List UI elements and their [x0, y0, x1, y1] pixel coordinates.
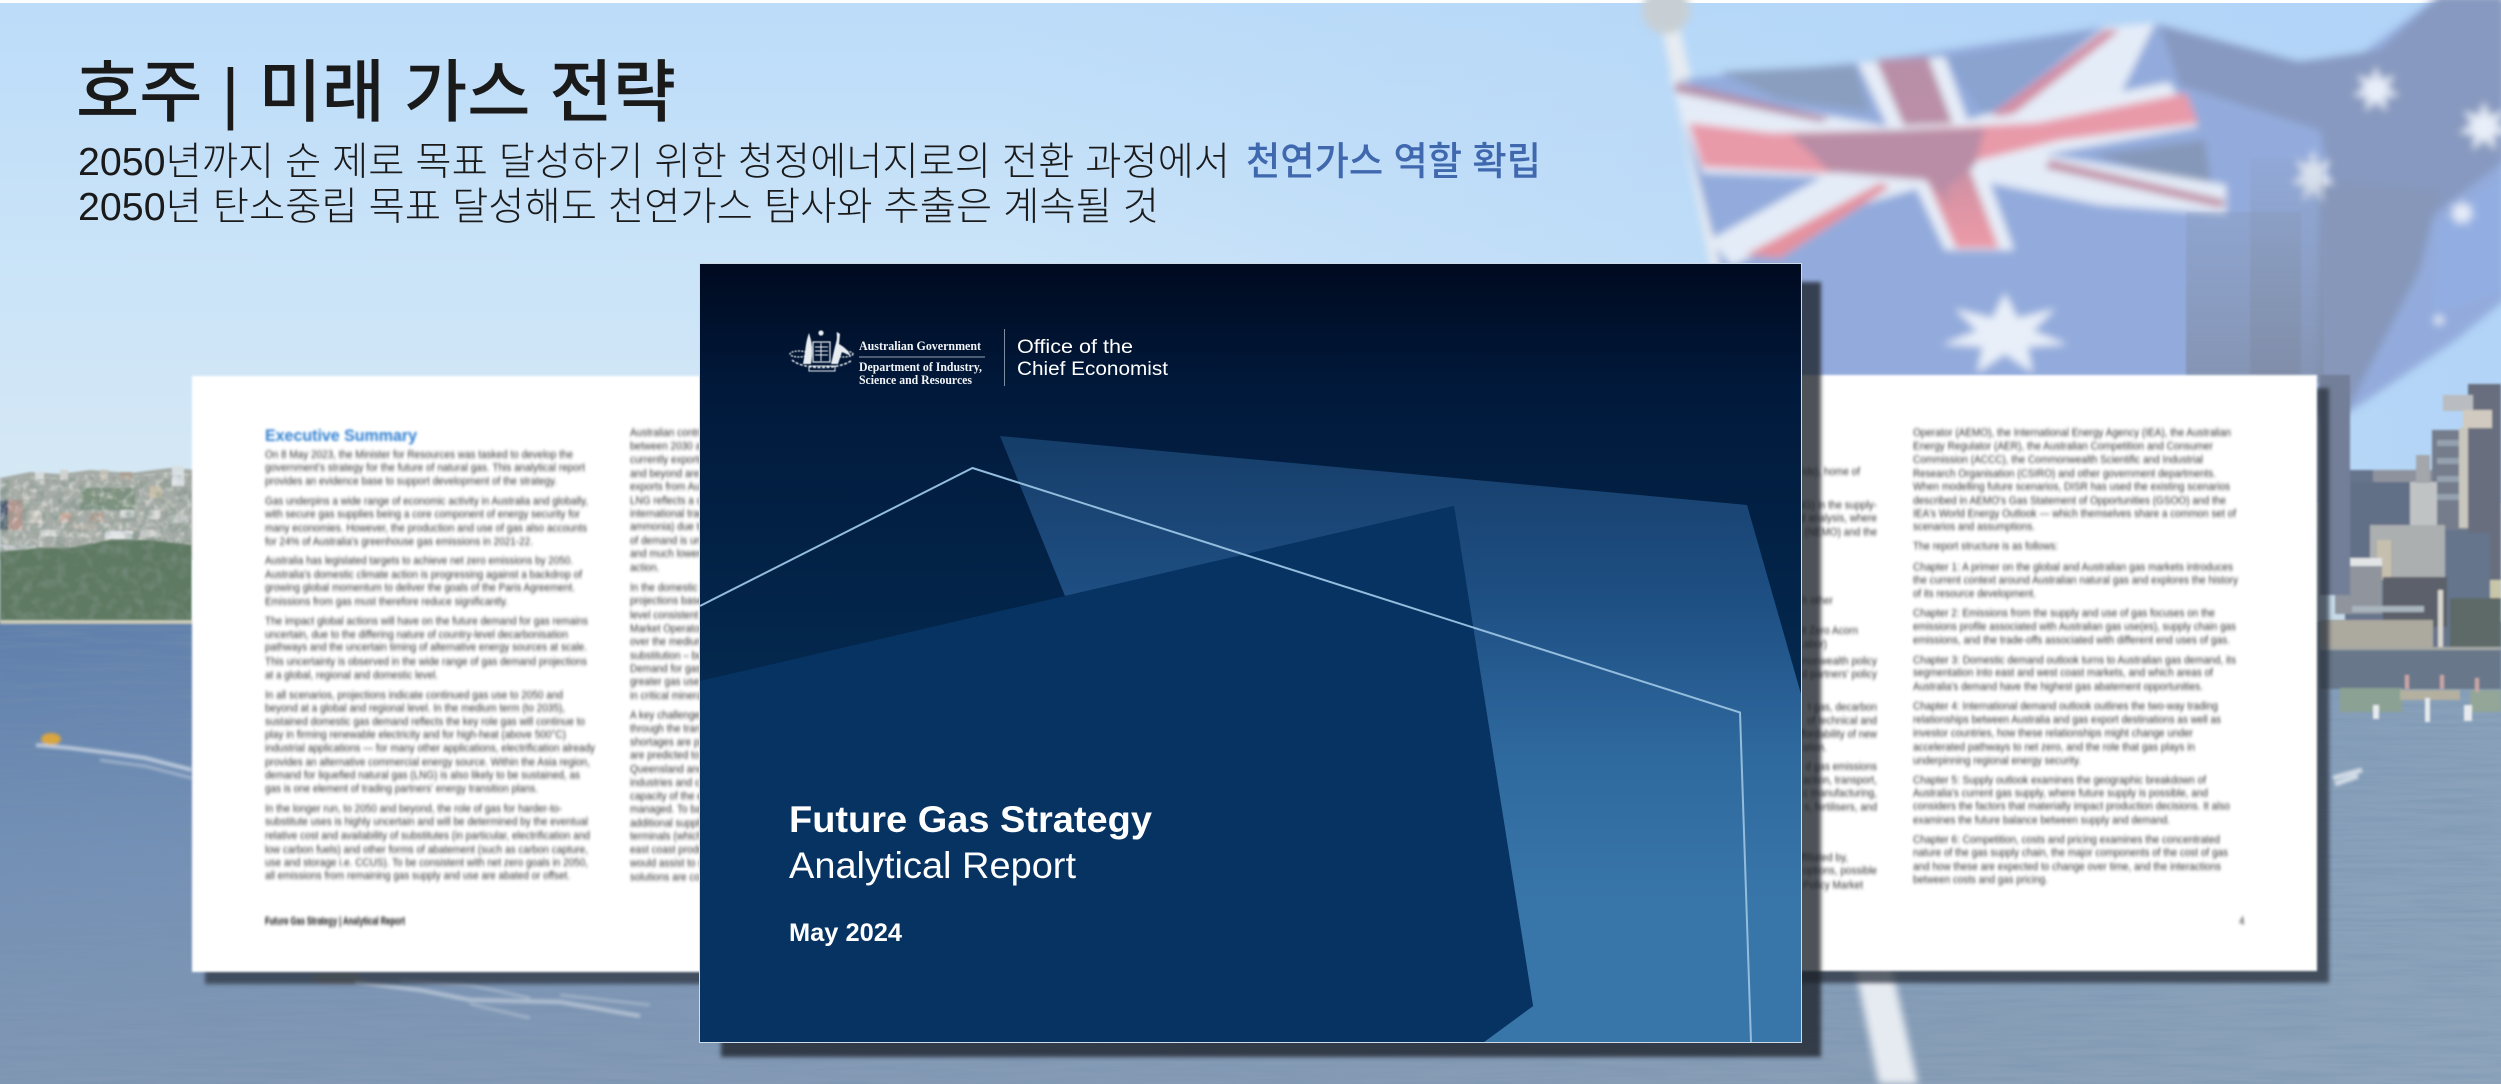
left page body column two: solutions are com: [630, 871, 708, 884]
left page sheet: [192, 376, 712, 972]
right page body column: the current context around Australian natural gas and explores the history: [1913, 574, 2239, 587]
left page body column one: for 24% of Australia's greenhouse gas emissions in 2021-22.: [265, 536, 533, 548]
left page body column one: Australia's domestic climate action is progressing against a backdrop of: [265, 568, 582, 581]
left page body column two: and much lower i: [630, 548, 705, 560]
left page body column two: Market Operator: [630, 622, 703, 635]
left report page: Executive Summary: [192, 376, 716, 984]
cover date: May 2024: [789, 919, 902, 947]
left page body column one: all emissions from remaining gas supply and use are abated or offset.: [265, 870, 570, 882]
left page body column two: [629, 426, 716, 884]
department name: Science and Resources: [859, 373, 972, 387]
right page body column: emissions profile associated with Australian gas use(es), supply chain gas: [1913, 620, 2236, 633]
union jack: [1669, 23, 2226, 266]
report cover: Future Gas Strategy: [700, 264, 1802, 1042]
left page body column two: ammonia) due to t: [630, 521, 710, 533]
left page body column one: low carbon fuels) and other forms of abatement (such as carbon capture,: [265, 843, 588, 856]
left page body column two: Australian contribut: [630, 426, 715, 439]
sky: [0, 3, 2501, 625]
left page body column two: are predicted to e: [630, 749, 708, 762]
right page clipped first column: Net Zero Acorn: [1791, 624, 1858, 637]
left page body column two: through the trans: [630, 723, 706, 735]
translucent skyscraper over flag: [2186, 158, 2350, 595]
right page clipped first column: options, possible: [1803, 864, 1877, 877]
left page body column one: use and storage i.e. CCUS). To be consistent with net zero goals in 2050,: [265, 856, 588, 869]
right page body column: accelerated pathways to net zero, and the role that gas plays in: [1913, 741, 2195, 754]
left page body column one: at a global, regional and domestic level.: [265, 669, 438, 681]
right page body column: considers the factors that materially impact production decisions. It also: [1913, 800, 2230, 813]
left page body column two: In the domestic co: [630, 581, 711, 594]
left page heading: Executive Summary: [265, 426, 418, 445]
right page clipped first column: d partners' policy: [1802, 668, 1878, 681]
left page body column two: managed. To bal: [630, 803, 704, 816]
left page body column one: pathways and the uncertain timing of alternative energy sources at scale.: [265, 641, 587, 654]
left page body column two: currently exported: [630, 453, 710, 466]
right page body column: Chapter 6: Competition, costs and pricing examines the concentrated: [1913, 833, 2220, 846]
right page body column: Australia's current gas supply, where future supply is possible, and: [1913, 787, 2208, 800]
left page body column two: substitution – but: [630, 649, 706, 662]
right report page: report structure: [1779, 375, 2329, 983]
right page clipped first column: Commonwealth policy: [1779, 655, 1878, 667]
left page body column two: and beyond are ex: [630, 467, 713, 480]
right page clipped first column: NG) in the supply-: [1797, 499, 1877, 512]
subtitle line one: 2050년까지 순 제로 목표 달성하기 위한 청정에너지로의 전환 과정에서: [78, 141, 1230, 184]
left page body column two: in critical minerals: [630, 689, 709, 702]
right page body column: nature of the gas supply chain, the major components of the cost of gas: [1913, 847, 2228, 859]
left page body column two: projections based: [630, 595, 708, 607]
right page clipped first column: t gas, decarbon: [1808, 701, 1877, 714]
right page body column: examines the future balance between supply and demand.: [1913, 814, 2170, 827]
right page clipped first column: of technical and: [1807, 715, 1877, 727]
right page body column: of its resource development.: [1913, 587, 2036, 600]
right page body column: Energy Regulator (AER), the Australian Competition and Consumer: [1913, 440, 2213, 452]
left page body column one: uncertain, due to the differing nature of country-level decarbonisation: [265, 629, 568, 641]
left page body column one: government's strategy for the future of natural gas. This analytical report: [265, 461, 585, 474]
right page body column: The report structure is as follows:: [1913, 540, 2058, 553]
right page clipped first column: h other: [1802, 595, 1833, 607]
cover subtitle: Analytical Report: [789, 845, 1077, 886]
right page body column: and how these are expected to change over time, and the interactions: [1913, 860, 2221, 873]
icon: Australian coat of arms: [790, 330, 853, 371]
left page body column one: substitute uses is highly uncertain and will be determined by the eventual: [265, 816, 588, 828]
left page body column one: Gas underpins a wide range of economic activity in Australia and globally,: [265, 495, 588, 508]
left shoreline city: [0, 466, 200, 624]
right page clipped first column: [1779, 465, 1878, 892]
right page clipped first column: action, transport,: [1803, 774, 1877, 787]
right page body column: Chapter 4: International demand outlook outlines the two-way trading: [1913, 700, 2218, 712]
right page body column: 4: [2239, 915, 2245, 928]
subtitle line two: 2050년 탄소중립 목표 달성해도 천연가스 탐사와 추출은 계속될 것: [78, 186, 1159, 229]
left page body column one: relative cost and availability of substitutes (in particular, electrification and: [265, 829, 590, 842]
left page body column two: additional supply: [630, 817, 705, 830]
right page body column: IEA's World Energy Outlook — which themselves share a common set of: [1913, 507, 2236, 520]
flag cloth: [1672, 0, 2501, 420]
left page body column one: provides an alternative commercial energy source. Within the Asia region,: [265, 756, 590, 769]
left page body column one: sustained domestic gas demand reflects the key role gas will continue to: [265, 715, 585, 728]
left page body column two: exports from Austr: [630, 480, 711, 493]
left page body column two: level consistent w: [630, 609, 708, 622]
left page body column two: LNG reflects a com: [630, 494, 716, 507]
right page body column: segmentation into east and west coast markets, and which areas of: [1913, 666, 2213, 679]
left page body column two: A key challenge f: [630, 709, 706, 722]
left page body column two: would assist to r: [629, 857, 702, 870]
right page body column: Research Organisation (CSIRO) and other government departments.: [1913, 467, 2216, 480]
right page clipped first column: d gas emissions: [1805, 761, 1877, 773]
left page body column one: Emissions from gas must therefore reduce significantly.: [265, 595, 508, 608]
right page body column: underpinning regional energy security.: [1913, 754, 2081, 767]
flag stars: [1943, 66, 2501, 373]
left page body column two: east coast produ: [630, 843, 704, 856]
left page body column one: In the longer run, to 2050 and beyond, the role of gas for harder-to-: [265, 802, 562, 815]
cover title: Future Gas Strategy: [789, 799, 1152, 840]
right page clipped first column: (NEMO) and the: [1804, 526, 1877, 539]
right page body column: relationships between Australia and gas export destinations as well as: [1913, 713, 2221, 726]
right waterfront city: [2320, 384, 2501, 722]
left page body column two: of demand is unce: [630, 534, 712, 547]
left page body column two: greater gas use i: [630, 676, 704, 688]
right page body column: Chapter 5: Supply outlook examines the geographic breakdown of: [1913, 774, 2206, 787]
left page body column one: beyond at a global and regional level. In the medium term (to 2035),: [265, 702, 565, 715]
left page body column one: This uncertainty is observed in the wide range of gas demand projections: [265, 655, 587, 668]
right page clipped first column: Policy Market: [1803, 879, 1863, 892]
right page clipped first column: ation.: [1803, 742, 1827, 754]
left page body column two: action.: [630, 561, 659, 574]
right page clipped first column: affordability of new: [1794, 728, 1877, 741]
right page body column: Australia's demand have the highest gas abatement opportunities.: [1913, 680, 2203, 693]
right page clipped first column: d analysis, where: [1800, 512, 1877, 525]
Australian Government wordmark: Australian Government: [859, 339, 982, 353]
left page body column two: terminals (which: [630, 830, 702, 843]
right page body column: Commission (ACCC), the Commonwealth Scientific and Industrial: [1913, 453, 2203, 466]
left page body column two: over the medium: [630, 635, 704, 648]
department name: Department of Industry,: [859, 360, 982, 374]
right page body column: Operator (AEMO), the International Energy Agency (IEA), the Australian: [1913, 426, 2231, 439]
left page body column one: [264, 448, 596, 928]
right page shadow: [1800, 388, 2329, 983]
left page body column two: Queensland and: [630, 763, 703, 776]
blurred Australian flag: [1642, 0, 2501, 1084]
ferry and wakes on the water: [36, 733, 2362, 1018]
right page clipped first column: affiliated by,: [1796, 851, 1848, 864]
left page shadow: [205, 389, 715, 984]
left page body column one: Australia has legislated targets to achieve net zero emissions by 2050.: [265, 554, 573, 567]
right page clipped first column: Labor): [1798, 638, 1827, 650]
Office of the Chief Economist: Office of the: [1017, 337, 1133, 358]
Office of the Chief Economist: Chief Economist: [1017, 359, 1169, 380]
left page body column one: many economies. However, the production and use of gas also accounts: [265, 522, 587, 535]
left page body column two: capacity of the e: [630, 790, 703, 803]
left page body column two: shortages are pr: [630, 736, 703, 749]
Office of the Chief Economist: [1017, 337, 1169, 380]
left page body column one: growing global momentum to deliver the goals of the Paris Agreement.: [265, 581, 575, 594]
left page body column one: The impact global actions will have on the future demand for gas remains: [265, 615, 588, 628]
logo divider: [1004, 329, 1005, 386]
right page clipped first column: c manufacturing,: [1803, 787, 1877, 800]
report cover shadow: [721, 282, 1821, 1057]
harbour water: [0, 622, 2501, 1084]
right page body column: When modelling future scenarios, DISR has used the existing scenarios: [1913, 480, 2230, 493]
right page clipped first column: s, fertilisers, and: [1804, 801, 1877, 814]
right page body column: [1913, 426, 2245, 928]
left page body column two: Demand for gas: [630, 662, 701, 675]
flag pole: [1660, 20, 1918, 1084]
right page body column: between costs and gas pricing.: [1913, 874, 2048, 886]
left page body column one: Future Gas Strategy | Analytical Report: [265, 915, 405, 928]
left page body column one: with secure gas supplies being a core component of energy security for: [264, 508, 580, 521]
left page body column one: provides an evidence base to support development of the strategy.: [265, 475, 557, 487]
right page body column: Chapter 1: A primer on the global and Australian gas markets introduces: [1913, 561, 2233, 574]
right page body column: Chapter 2: Emissions from the supply and use of gas focuses on the: [1913, 607, 2215, 620]
left page body column two: international trade: [630, 507, 710, 520]
left page body column two: between 2030 and: [630, 440, 712, 452]
highlighted phrase: 천연가스 역할 확립: [1246, 141, 1541, 184]
cover background: [700, 264, 1802, 1042]
left page body column one: In all scenarios, projections indicate continued gas use to 2050 and: [265, 689, 563, 702]
department name: [859, 356, 985, 387]
left page body column one: gas is one element of trading partners' energy transition plans.: [265, 782, 538, 795]
cover geometric shapes: [700, 436, 1801, 1042]
left page body column one: industrial applications — for many other applications, electrification already: [265, 742, 596, 755]
right page body column: described in AEMO's Gas Statement of Opportunities (GSOO) and the: [1913, 494, 2226, 507]
right page body column: scenarios and assumptions.: [1913, 521, 2035, 533]
cover logo: government crest and office name: [790, 329, 1169, 387]
title: 호주 | 미래 가스 전략: [76, 55, 676, 131]
left page body column one: demand for liquefied natural gas (LNG) is also likely to be sustained, as: [265, 769, 580, 782]
left page body column one: play in firming renewable electricity and for high-heat (above 500°C): [265, 728, 566, 741]
right page body column: investor countries, how these relationships might change under: [1913, 727, 2193, 739]
right page clipped first column: ids), home of: [1802, 465, 1860, 478]
left page body column one: On 8 May 2023, the Minister for Resources was tasked to develop the: [265, 448, 573, 461]
right page body column: Chapter 3: Domestic demand outlook turns to Australian gas demand, its: [1913, 654, 2236, 667]
left page body column two: industries and co: [630, 777, 706, 789]
right page sheet: [1795, 375, 2317, 971]
pole finial: [1642, 0, 1690, 34]
right page body column: emissions, and the trade-offs associated with different end uses of gas.: [1913, 634, 2230, 646]
